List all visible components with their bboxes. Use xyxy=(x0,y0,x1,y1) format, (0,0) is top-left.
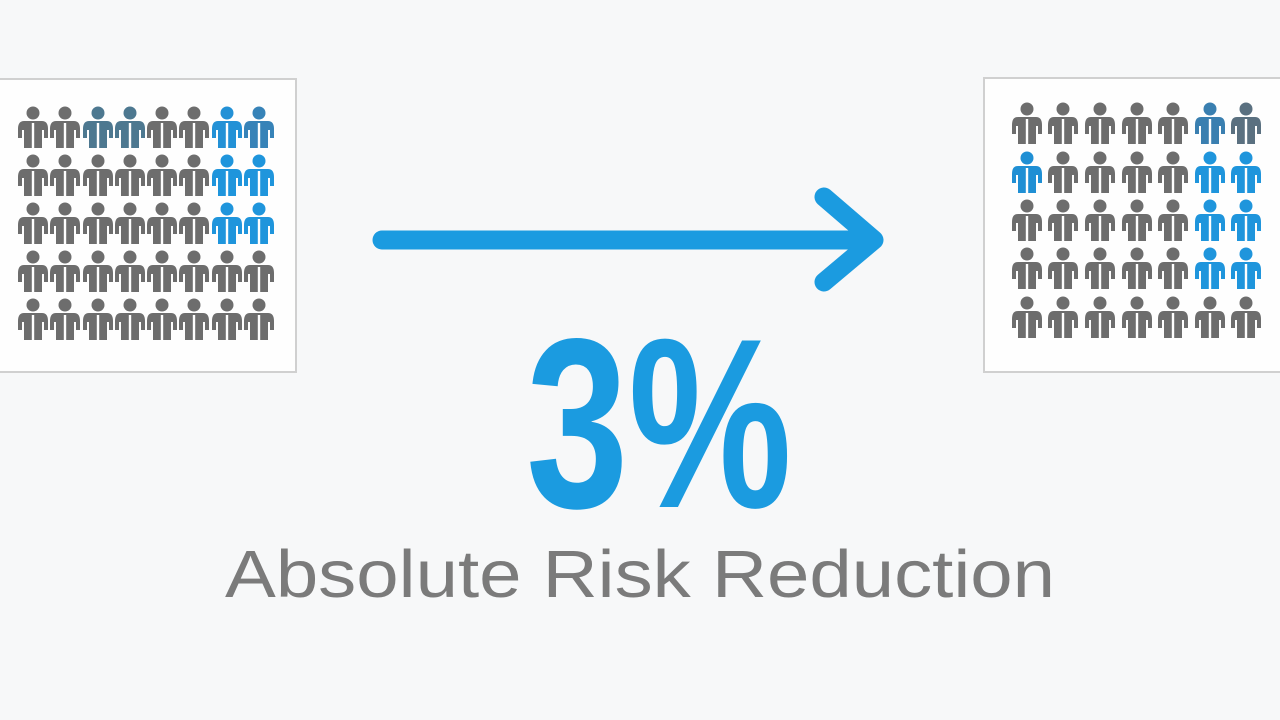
label: Absolute Risk Reduction: Absolute Risk Reduction xyxy=(225,537,1055,612)
panel: before group xyxy=(0,79,296,372)
arrow xyxy=(382,197,874,282)
big number: 3%: 3% xyxy=(526,287,792,559)
panel: after group xyxy=(984,78,1280,372)
